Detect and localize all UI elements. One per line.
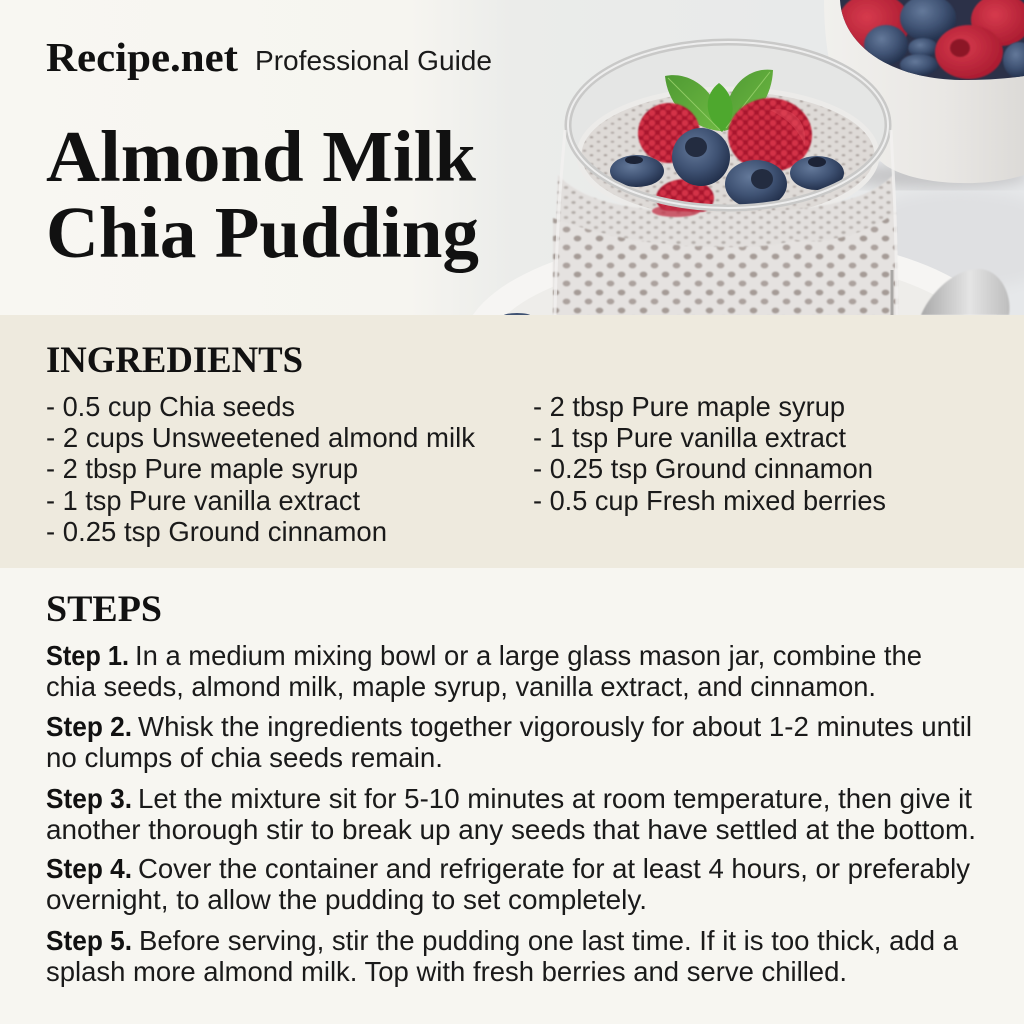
spoon — [921, 269, 1010, 315]
heading: steps: STEPS — [46, 589, 162, 630]
title: Almond Milk — [46, 116, 476, 197]
list: ingredients right column: - 1 tsp Pure vanilla extract — [533, 422, 846, 453]
panel: steps — [46, 589, 976, 987]
step 4: Step 4. — [46, 853, 132, 884]
brand: Recipe.net: Recipe.net — [46, 34, 238, 80]
step 2 — [46, 711, 972, 773]
step 4 — [46, 853, 970, 915]
list: ingredients left column: - 1 tsp Pure vanilla extract — [46, 485, 360, 516]
step 5: Before serving, stir the pudding one last time. If it is too thick, add a — [139, 925, 958, 956]
step 1: chia seeds, almond milk, maple syrup, vanilla extract, and cinnamon. — [46, 671, 876, 702]
refracted berry seen through rim — [652, 205, 700, 217]
list: ingredients right column: - 0.25 tsp Ground cinnamon — [533, 453, 873, 484]
step 5: Step 5. — [46, 925, 132, 956]
title: Chia Pudding — [46, 192, 479, 273]
step 3 — [46, 783, 976, 845]
step 1: Step 1. — [46, 640, 129, 671]
step 5 — [46, 925, 958, 987]
plate — [485, 256, 952, 315]
list: ingredients left column: - 0.5 cup Chia seeds — [46, 391, 295, 422]
list: ingredients left column: - 0.25 tsp Ground cinnamon — [46, 516, 387, 547]
heading: ingredients: INGREDIENTS — [46, 340, 303, 381]
list: ingredients right column: - 2 tbsp Pure maple syrup — [533, 391, 845, 422]
step 2: no clumps of chia seeds remain. — [46, 742, 443, 773]
step 3: Step 3. — [46, 783, 132, 814]
tagline: Professional Guide — [255, 45, 492, 76]
step 3: another thorough stir to break up any seeds that have settled at the bottom. — [46, 814, 976, 845]
step 3: Let the mixture sit for 5-10 minutes at room temperature, then give it — [138, 783, 972, 814]
blueberries on pudding — [610, 128, 844, 208]
glass back interior — [830, 65, 882, 146]
mint leaves — [665, 70, 773, 132]
title — [46, 116, 479, 273]
step 1 — [46, 640, 922, 702]
bowl of berries — [824, 0, 1024, 188]
list: ingredients right column: - 0.5 cup Fresh mixed berries — [533, 485, 886, 516]
list: ingredients left column — [46, 391, 476, 547]
step 4: overnight, to allow the pudding to set completely. — [46, 884, 647, 915]
step 4: Cover the container and refrigerate for at least 4 hours, or preferably — [138, 853, 970, 884]
step 5: splash more almond milk. Top with fresh berries and serve chilled. — [46, 956, 847, 987]
list: ingredients right column — [533, 391, 886, 516]
pudding surface — [579, 89, 877, 221]
list: ingredients left column: - 2 cups Unsweetened almond milk — [46, 422, 476, 453]
list: ingredients left column: - 2 tbsp Pure maple syrup — [46, 453, 358, 484]
step 1: In a medium mixing bowl or a large glass mason jar, combine the — [135, 640, 922, 671]
step 2: Whisk the ingredients together vigorously for about 1-2 minutes until — [138, 711, 972, 742]
panel: ingredients — [0, 315, 1024, 568]
raspberries on pudding — [638, 98, 812, 217]
glass rim — [555, 42, 897, 315]
pudding in front of glass — [553, 175, 898, 315]
photo: chia pudding in a glass with berries — [475, 0, 1024, 315]
step 2: Step 2. — [46, 711, 132, 742]
small blueberry on plate — [504, 313, 530, 315]
